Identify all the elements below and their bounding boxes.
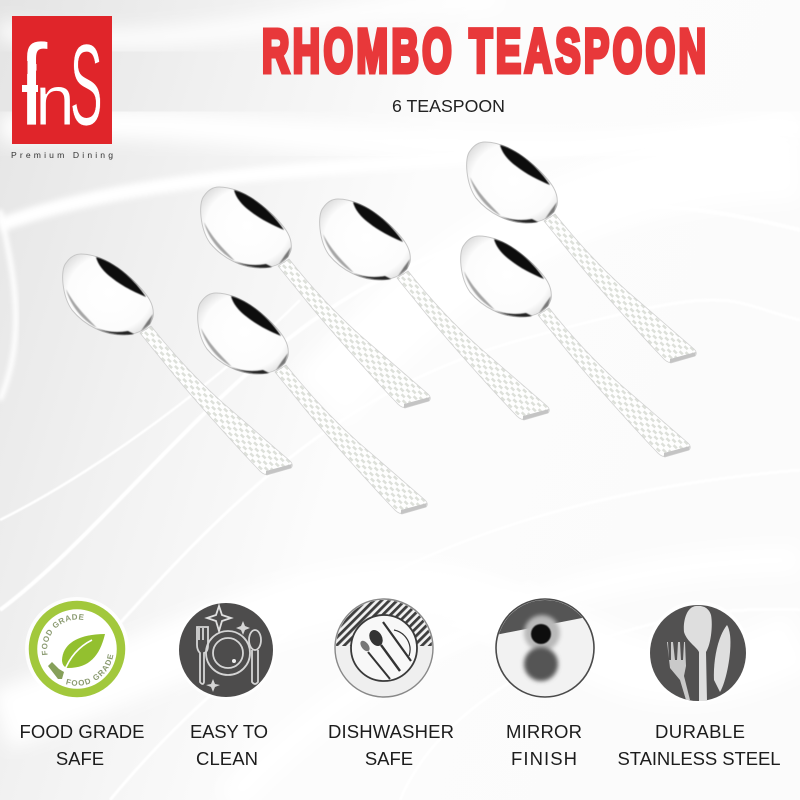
icon: food grade badge (25, 597, 126, 698)
spoon 3: back centre (320, 199, 549, 420)
logo: fnS Premium Dining (11, 16, 113, 160)
label: easy to clean: CLEAN (196, 748, 258, 769)
spoon 5: right front (461, 236, 690, 457)
title: RHOMBO TEASPOON (262, 17, 706, 85)
feature: food grade safe (20, 597, 144, 769)
label: mirror finish: FINISH (511, 748, 577, 769)
feature: dishwasher safe (328, 598, 454, 769)
label: easy to clean: EASY TO (190, 721, 268, 742)
spoon 1: far left (63, 254, 292, 475)
label: durable stainless steel: STAINLESS STEEL (618, 748, 780, 769)
feature: durable stainless steel (618, 601, 780, 769)
icon: mirror reflected ball (495, 598, 595, 698)
logo letters: S (70, 19, 102, 150)
label: durable stainless steel: DURABLE (655, 721, 745, 742)
spoon 4: back right (467, 142, 696, 363)
logo letters (14, 19, 102, 150)
label: mirror finish: MIRROR (506, 721, 582, 742)
label: dishwasher safe: DISHWASHER (328, 721, 454, 742)
label: dishwasher safe: SAFE (365, 748, 413, 769)
logo letters: f (17, 20, 48, 150)
feature: easy to clean (176, 600, 276, 769)
logo letters: n (35, 61, 75, 141)
spoon 2: back left (201, 187, 430, 408)
spoon 6: front centre (198, 293, 427, 514)
label: food grade safe: SAFE (56, 748, 104, 769)
feature: mirror finish (495, 598, 595, 765)
logo red square (12, 16, 112, 144)
label: food grade safe: FOOD GRADE (20, 721, 144, 742)
icon: plate with sparkles (176, 600, 276, 700)
icon: food grade badge: FOOD GRADE (42, 614, 84, 656)
icon: plate with cutlery (335, 598, 433, 697)
icon: food grade badge: FOOD GRADE (66, 654, 114, 686)
subtitle: 6 TEASPOON (392, 96, 505, 116)
logo tagline: Premium Dining (11, 150, 113, 160)
icon: cutlery on dark disc (650, 605, 746, 701)
